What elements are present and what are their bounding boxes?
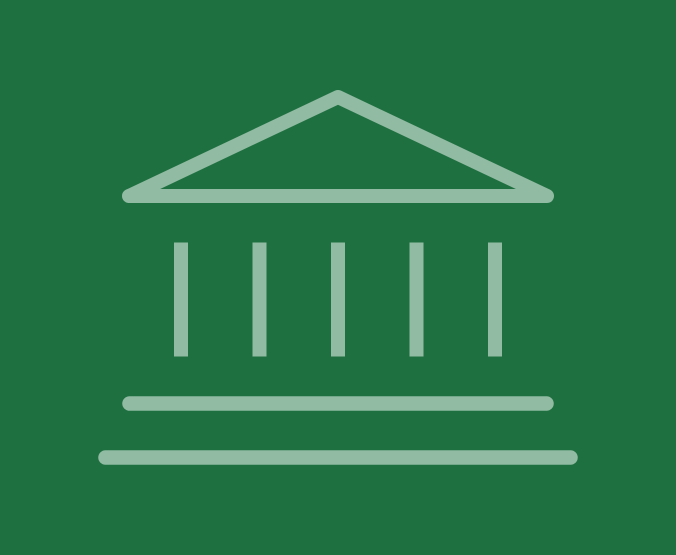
- icon: classical bank building: [106, 97, 570, 458]
- icon: lower step: [106, 450, 570, 465]
- icon: columns: [181, 242, 495, 356]
- icon: upper step: [130, 396, 546, 411]
- icon: triangular roof: [129, 97, 547, 196]
